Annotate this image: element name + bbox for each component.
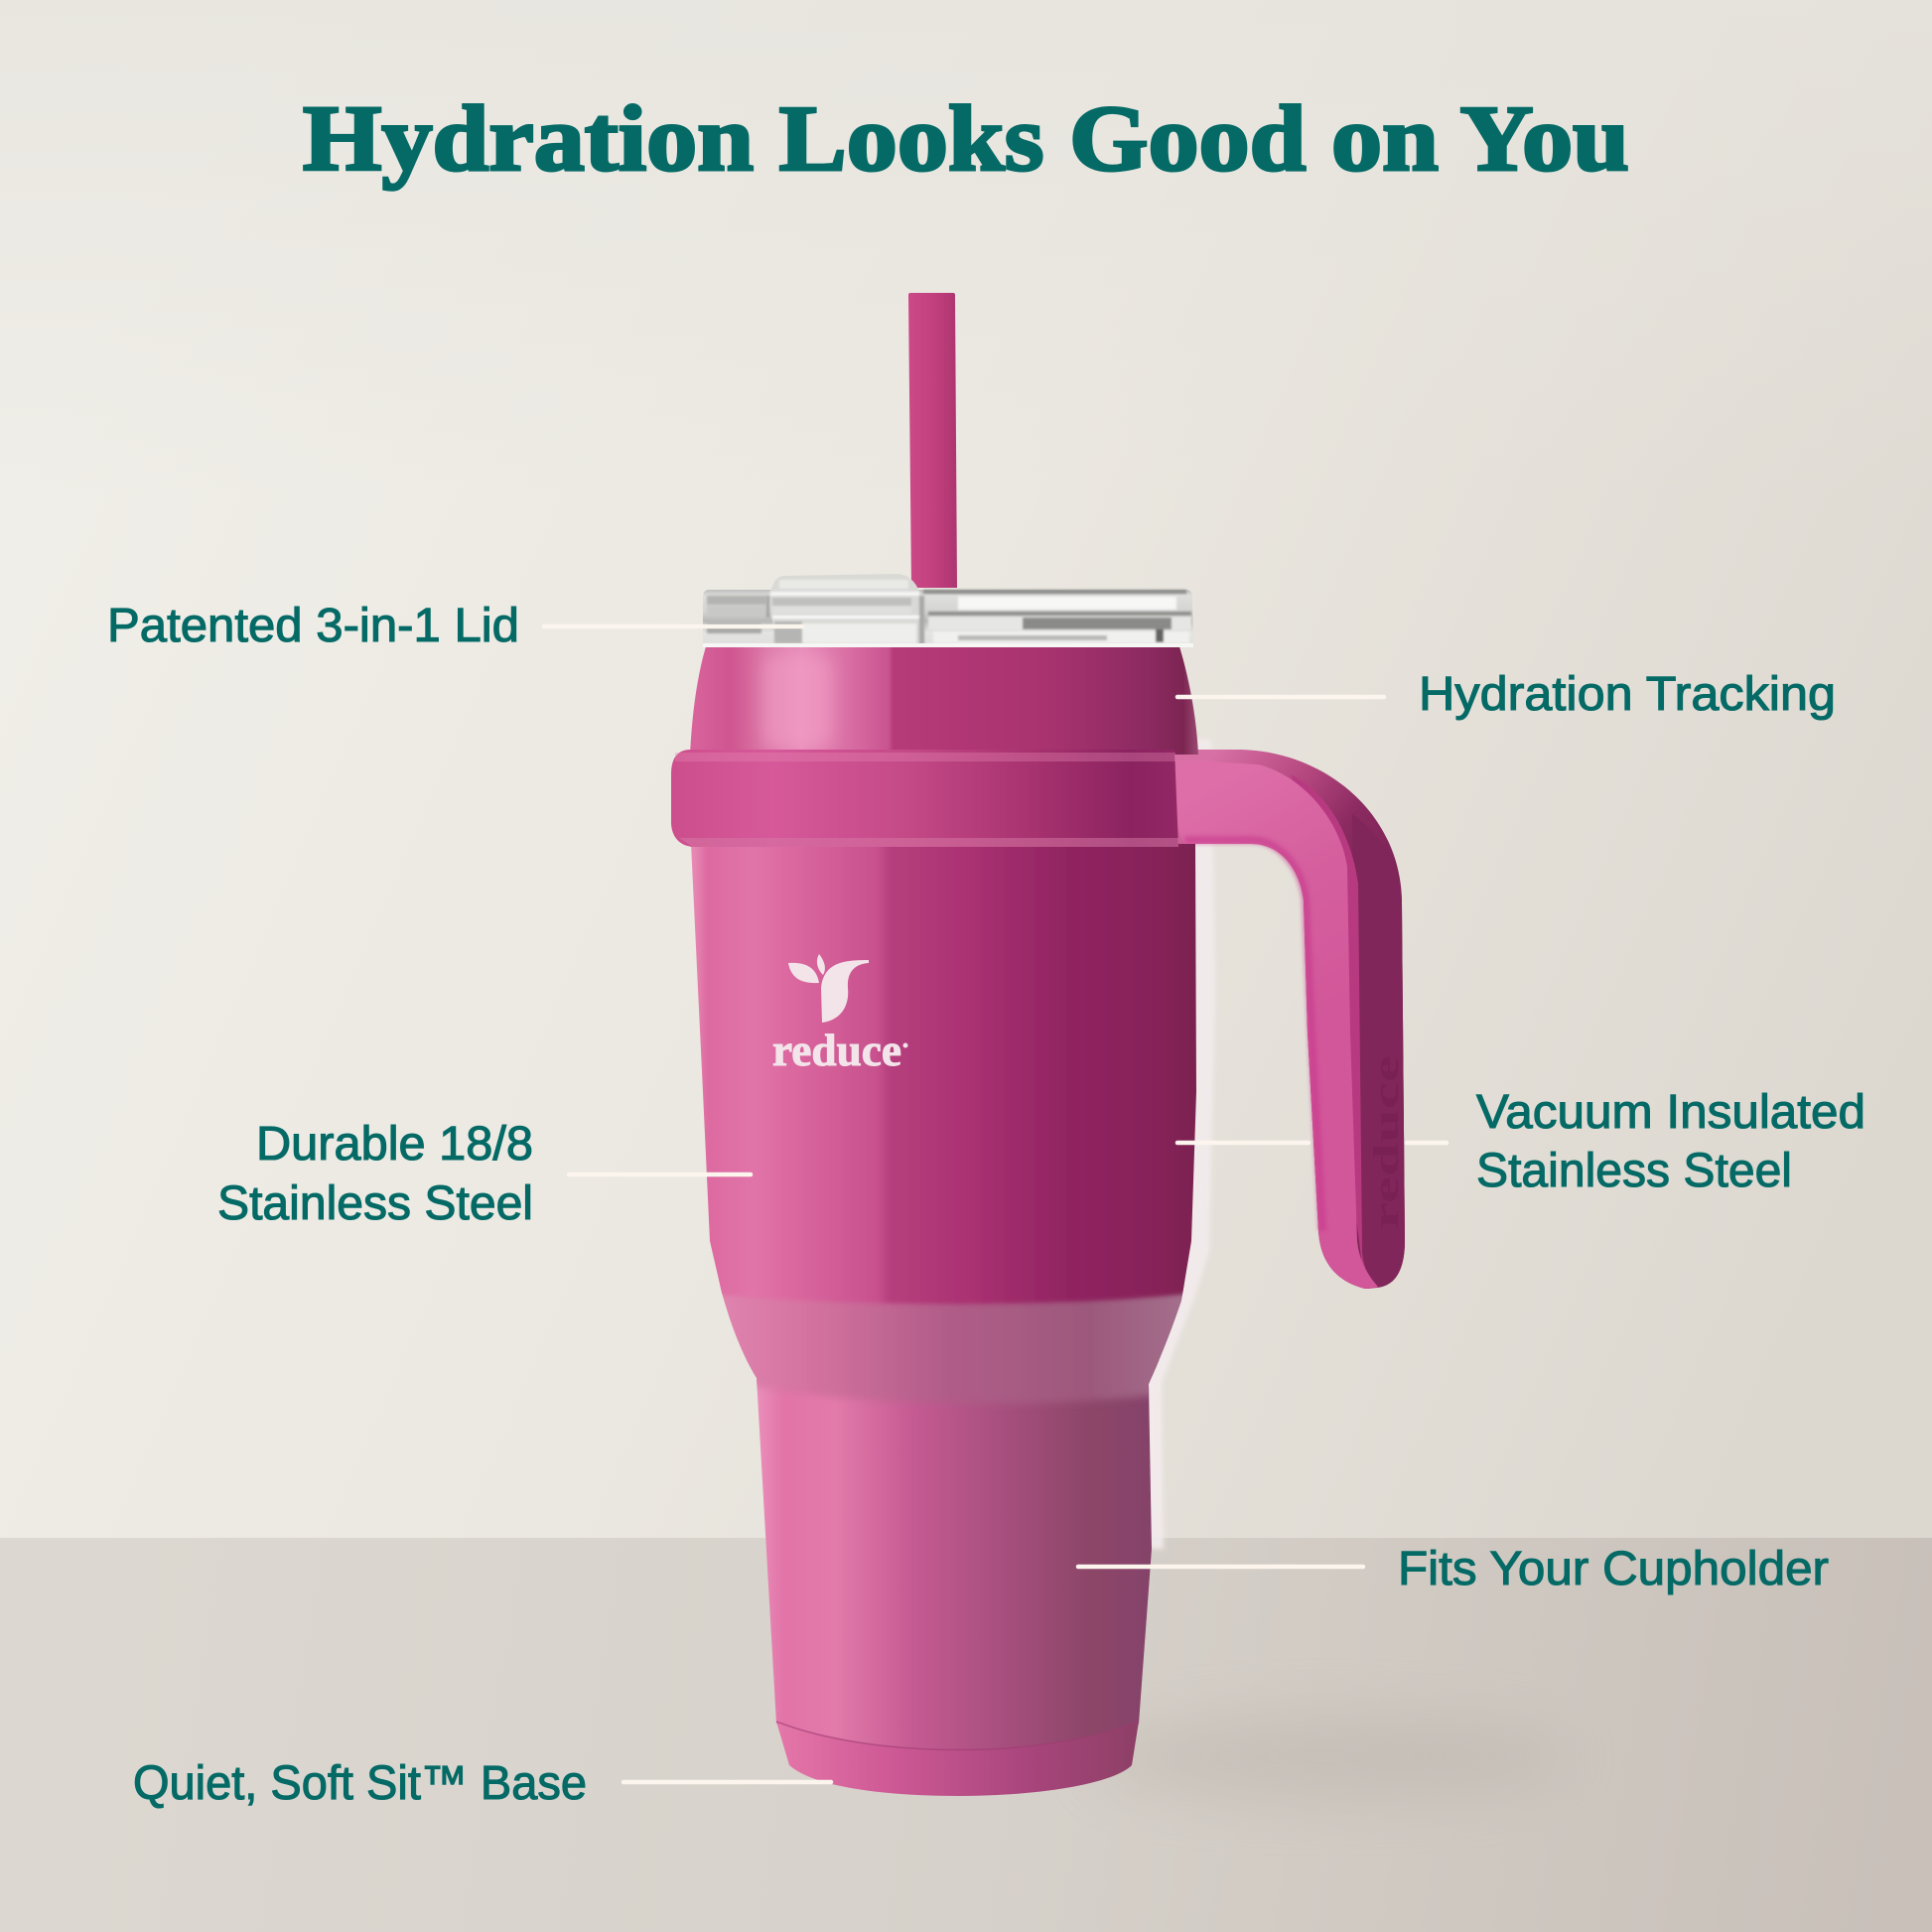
main body and lower cup	[685, 834, 1211, 1782]
straw	[908, 293, 957, 588]
main body	[685, 834, 1211, 1305]
collar band	[671, 750, 1178, 847]
logo wordmark: reduce	[772, 1025, 901, 1075]
lid flip tab	[768, 574, 925, 645]
leader line: vacuum right	[1407, 1141, 1447, 1145]
handle inner edge saturation	[1184, 840, 1322, 1231]
table surface	[0, 1538, 1932, 1932]
tumbler product illustration	[671, 293, 1406, 1796]
callout: durable stainless steel	[217, 1118, 751, 1230]
handle	[1167, 750, 1406, 1289]
label: stainless steel: Stainless Steel	[217, 1177, 533, 1230]
body edge reflection	[1142, 740, 1215, 1549]
collar top edge light	[675, 753, 1175, 761]
leader line: cupholder	[1078, 1565, 1363, 1569]
collar bottom edge light	[679, 838, 1178, 847]
handle dark side	[1352, 814, 1405, 1288]
lid	[703, 574, 1193, 647]
wall top shading	[0, 0, 1932, 496]
handle outer shell	[1167, 750, 1405, 1289]
leader line: lid	[544, 624, 802, 628]
handle bevel band	[1291, 774, 1378, 1289]
logo leaf mark	[788, 954, 869, 1023]
handle light face	[1176, 759, 1378, 1289]
collar ring	[671, 750, 1178, 847]
handle embossed wordmark: reduce	[1366, 1055, 1406, 1229]
base seam	[776, 1722, 1139, 1749]
soft sit base	[776, 1722, 1139, 1796]
lid streaks	[707, 590, 1191, 643]
tumbler shadow on table	[1092, 1718, 1569, 1797]
lower cup	[745, 1360, 1162, 1782]
leader line: base	[623, 1780, 831, 1784]
reduce logo	[772, 954, 907, 1075]
label: lid: Patented 3-in-1 Lid	[107, 600, 519, 652]
callout: vacuum insulated	[1177, 1086, 1865, 1197]
leader line: durable	[569, 1173, 751, 1176]
logo registered mark	[903, 1042, 907, 1048]
lid main band	[703, 590, 1193, 647]
shoulder taper	[695, 1281, 1211, 1404]
title: Hydration Looks Good on You	[303, 87, 1629, 191]
leader line: vacuum left	[1177, 1141, 1309, 1145]
upper body	[690, 643, 1198, 755]
background wall	[0, 0, 1932, 1541]
lid tab highlights	[766, 580, 924, 645]
leader line: tracking	[1177, 695, 1384, 699]
lid bottom rim	[703, 643, 1193, 647]
upper body highlight	[762, 655, 834, 747]
label: cupholder: Fits Your Cupholder	[1398, 1543, 1829, 1595]
label: durable: Durable 18/8	[256, 1118, 533, 1171]
label: vacuum insulated: Vacuum Insulated	[1476, 1086, 1865, 1139]
label: tracking: Hydration Tracking	[1419, 668, 1836, 721]
label: base: Quiet, Soft Sit™ Base	[133, 1757, 587, 1810]
label: vacuum stainless: Stainless Steel	[1476, 1145, 1792, 1197]
